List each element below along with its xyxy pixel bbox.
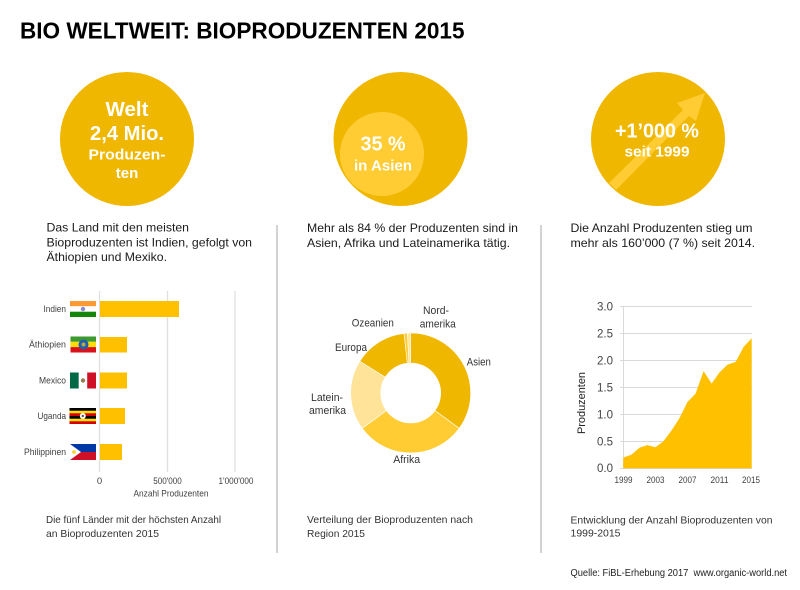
icon: flag Philippines: [70, 444, 96, 460]
donut labels: amerika: [420, 319, 457, 331]
source note: Quelle: FiBL-Erhebung 2017 www.organic-world.net: [570, 568, 787, 579]
caption: right: [570, 514, 773, 540]
caption: middle: [307, 514, 473, 540]
donut chart: producers by region: [309, 305, 491, 466]
segment: Europa: [360, 333, 407, 377]
country labels: Äthiopien: [29, 340, 66, 350]
circle: world producers: Welt: [106, 98, 149, 121]
text: middle intro: Mehr als 84 % der Produzenten sind in: [307, 221, 518, 235]
icon: flag Ethiopia: [70, 336, 96, 352]
x axis labels: 2011: [710, 475, 728, 486]
text: right intro: Die Anzahl Produzenten stieg um: [570, 221, 752, 235]
circle: world producers: [60, 72, 194, 206]
text: middle intro: [307, 221, 518, 250]
circle: 35 % in Asia: [334, 72, 468, 206]
text: left intro: Äthiopien und Mexiko.: [46, 250, 167, 264]
donut labels: Afrika: [393, 454, 421, 466]
axis labels: 0: [97, 476, 102, 487]
y axis labels: 0.5: [597, 436, 613, 448]
country labels: Indien: [44, 304, 66, 315]
x axis labels: 2003: [646, 475, 664, 486]
text: right intro: [570, 221, 755, 250]
circle: 35 % in Asia: in Asien: [354, 158, 412, 175]
segment: Asien: [411, 333, 471, 428]
donut labels: Ozeanien: [352, 318, 394, 330]
x axis labels: 2015: [742, 475, 760, 486]
bars: [100, 301, 179, 460]
y axis labels: 0.0: [597, 463, 613, 475]
area: [623, 338, 752, 468]
x axis labels: [614, 475, 760, 486]
circle: world producers: 2,4 Mio.: [90, 122, 164, 145]
text: middle intro: Asien, Afrika und Lateinamerika tätig.: [307, 236, 510, 250]
circle: 35 % in Asia: 35 %: [360, 134, 406, 156]
donut labels: amerika: [309, 405, 347, 417]
text: right intro: mehr als 160’000 (7 %) seit 2014.: [570, 236, 755, 250]
y axis labels: 1.0: [597, 410, 613, 422]
bar chart: top five countries: [24, 291, 254, 500]
axis labels: Anzahl Produzenten: [134, 488, 208, 500]
caption: middle: Region 2015: [307, 528, 365, 540]
circle: growth since 1999: seit 1999: [624, 144, 690, 161]
icon: growth arrow: [609, 93, 705, 190]
caption: right: 1999-2015: [570, 528, 621, 540]
area chart: producers 1999-2015: [576, 302, 760, 486]
axis labels: 1'000'000: [218, 476, 254, 487]
y axis labels: 3.0: [597, 302, 613, 314]
segment: Afrika: [362, 411, 459, 453]
donut labels: [309, 305, 491, 466]
country labels: Philippinen: [24, 447, 66, 458]
segment: Nordamerika: [407, 333, 411, 363]
country labels: [24, 304, 67, 458]
y axis labels: [597, 302, 613, 475]
icon: flag Mexico: [70, 372, 96, 388]
caption: middle: Verteilung der Bioproduzenten nach: [307, 514, 473, 526]
y axis title: Produzenten: [576, 372, 588, 434]
caption: right: Entwicklung der Anzahl Bioproduzenten von: [570, 514, 773, 526]
donut labels: Nord-: [423, 305, 449, 317]
text: left intro: [46, 221, 252, 264]
segment: Ozeanien: [404, 333, 409, 363]
x axis labels: 1999: [614, 475, 632, 486]
circle: world producers: ten: [116, 165, 138, 182]
donut labels: Europa: [335, 342, 368, 354]
circle: growth since 1999: +1’000 %: [615, 119, 699, 142]
axis labels: 500'000: [153, 476, 182, 487]
text: left intro: Bioproduzenten ist Indien, gefolgt von: [46, 236, 252, 250]
caption: left: an Bioproduzenten 2015: [46, 528, 159, 540]
caption: left: [46, 514, 221, 540]
title: BIO WELTWEIT: BIOPRODUZENTEN 2015: [20, 17, 465, 43]
y axis labels: 1.5: [597, 382, 613, 394]
segment: Lateinamerika: [351, 361, 386, 428]
x axis labels: 2007: [678, 475, 696, 486]
country labels: Mexico: [39, 376, 66, 386]
icon: flag Uganda: [70, 408, 96, 424]
text: left intro: Das Land mit den meisten: [46, 221, 189, 235]
icon: flag India: [70, 301, 96, 317]
circle: growth since 1999: [591, 72, 725, 206]
donut labels: Latein-: [311, 392, 343, 404]
caption: left: Die fünf Länder mit der höchsten Anzahl: [46, 514, 221, 526]
axis labels: [97, 476, 254, 500]
circle: world producers: Produzen-: [88, 146, 166, 164]
y axis labels: 2.5: [597, 328, 613, 340]
country labels: Uganda: [38, 411, 67, 422]
y axis labels: 2.0: [597, 356, 613, 368]
donut labels: Asien: [467, 357, 491, 369]
